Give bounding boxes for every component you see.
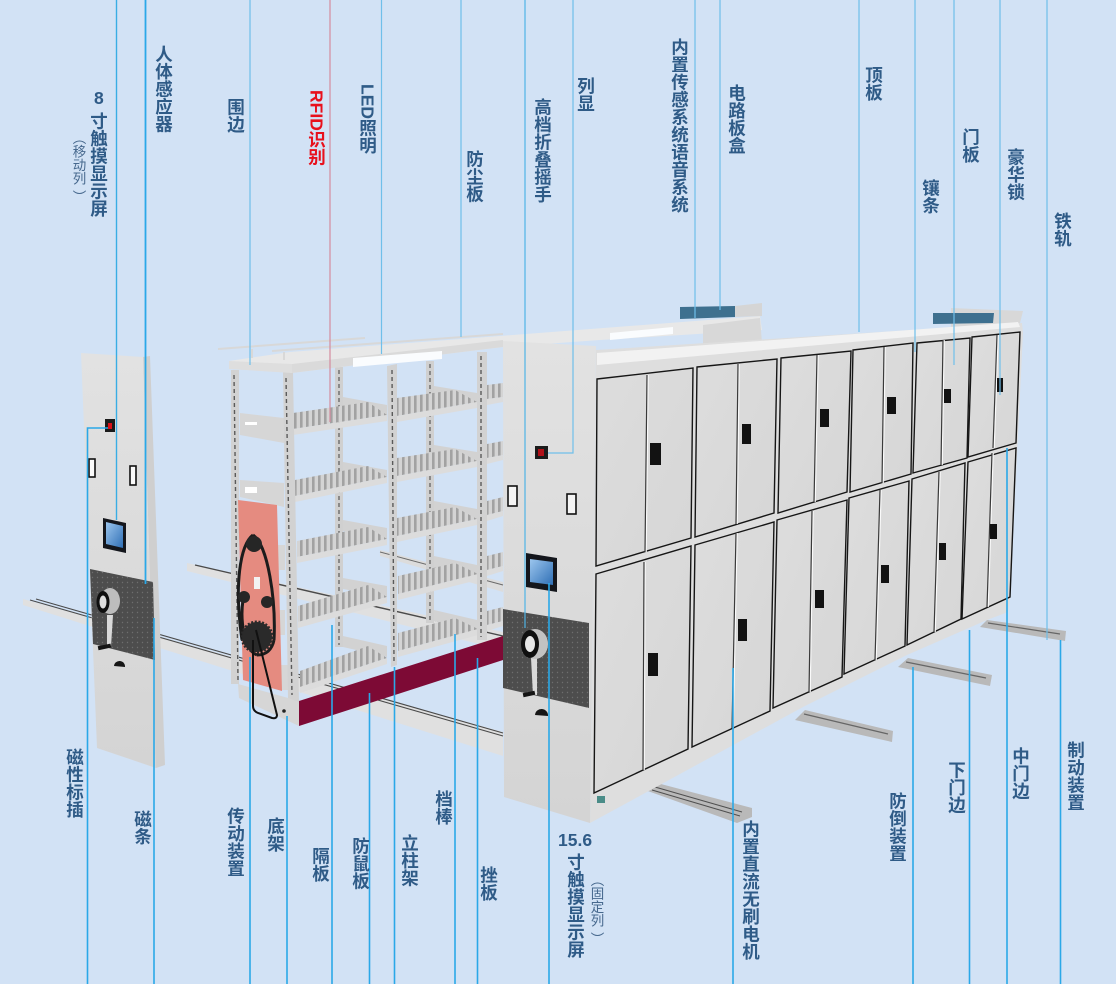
label: 隔板: 隔板 — [310, 847, 330, 882]
front uprights — [231, 352, 487, 702]
label: 传动装置: 传动装置 — [226, 807, 246, 877]
leader: 8寸触摸显示屏 — [116, 0, 118, 520]
base side — [238, 684, 299, 726]
left panel label holders — [89, 459, 136, 485]
leader: 磁性标插 — [88, 428, 108, 984]
cabinet green marker — [597, 796, 605, 803]
label: 豪华锁: 豪华锁 — [1006, 148, 1026, 200]
leader: 立柱架 — [394, 667, 396, 984]
cabinet label holders — [508, 486, 576, 514]
leader: 高档折叠摇手 — [524, 0, 526, 628]
rear unit post — [703, 318, 762, 348]
LED light bars — [353, 327, 673, 367]
left panel touch screen — [103, 518, 126, 553]
rail: inner rail — [380, 550, 503, 592]
rear top plate tab — [735, 303, 762, 317]
label: 下门边: 下门边 — [946, 761, 966, 814]
leader: 挫板 — [476, 658, 478, 984]
leader: 电路板盒 — [719, 0, 721, 310]
label: 8寸触摸显示屏（移动列） — [70, 88, 108, 217]
leader: 磁条 — [153, 618, 155, 984]
label: RFID识别: RFID识别 — [306, 90, 326, 166]
leader lines: bottom — [88, 428, 1060, 984]
label part: 寸触摸显示屏: 寸触摸显示屏 — [566, 853, 586, 958]
cabinet dark lower plate — [503, 609, 589, 708]
middle shelving unit — [218, 303, 762, 726]
leader: RFID识别 — [329, 0, 331, 422]
leader: 隔板 — [331, 625, 333, 984]
cabinet long face — [590, 323, 1023, 823]
label: 铁轨: 铁轨 — [1052, 212, 1072, 247]
leader: 底架 — [286, 716, 288, 984]
rail: rear rail — [187, 563, 503, 650]
drive mechanism — [238, 535, 286, 718]
leader: 铁轨 — [1046, 0, 1048, 640]
cabinet red LED display — [535, 446, 548, 459]
crimson anti-rodent plate — [299, 636, 503, 726]
lower doors — [594, 448, 1016, 793]
left panel red LED display — [105, 419, 115, 432]
label: 内置传感系统语音系统: 内置传感系统语音系统 — [670, 38, 690, 213]
shelves: first bay — [293, 402, 387, 693]
leader: 档棒 — [454, 634, 456, 984]
label: 电路板盒: 电路板盒 — [726, 84, 746, 154]
front rails — [645, 620, 1066, 823]
cabinet touch screen — [526, 553, 557, 592]
label part: 15.6: 15.6 — [558, 830, 592, 850]
label: 顶板: 顶板 — [864, 66, 884, 101]
leader: 下门边 — [968, 630, 970, 984]
top circuit box — [933, 313, 994, 324]
leader: 门板 — [953, 0, 955, 365]
label: 列显: 列显 — [576, 77, 596, 112]
leader: 内置直流无刷电机 — [732, 668, 734, 984]
leader: 内置传感系统语音系统 — [694, 0, 696, 318]
label part: 8: 8 — [94, 88, 104, 108]
rear brackets — [343, 386, 477, 657]
salmon drive panel — [238, 500, 282, 691]
left panel folding handle — [96, 588, 120, 650]
label: 15.6寸触摸显示屏（固定列） — [558, 830, 604, 958]
cabinet folding crank handle — [521, 629, 548, 697]
top surface — [597, 322, 1020, 365]
leader: 防鼠板 — [368, 693, 370, 984]
label: 中门边: 中门边 — [1010, 747, 1030, 800]
label part: 移动列 note: （ 移动列 ） — [70, 131, 86, 204]
label part: 寸触摸显示屏: 寸触摸显示屏 — [88, 112, 108, 217]
leader: 镶条 — [914, 0, 916, 352]
leader: 15.6寸触摸显示屏 — [548, 583, 550, 984]
left panel dark lower plate — [90, 569, 155, 660]
door centre seams — [643, 335, 997, 770]
rear circuit box — [680, 306, 735, 319]
label: 底架: 底架 — [266, 817, 286, 852]
rails behind the units — [23, 550, 503, 756]
top plate — [229, 316, 762, 373]
leader: 防倒装置 — [912, 667, 914, 984]
leader: 围边 — [249, 0, 251, 365]
leader: 制动装置 — [1060, 640, 1062, 984]
door locks — [648, 378, 1003, 676]
shelves: third bay — [487, 383, 503, 631]
cabinet end face — [503, 341, 596, 823]
upper doors — [596, 332, 1020, 566]
leader: 列显 — [548, 0, 573, 453]
label: 围边: 围边 — [226, 98, 246, 133]
rail foot 3 — [898, 658, 992, 686]
label part: 固定列 note: （ 固定列 ） — [588, 873, 604, 946]
leader lines: top — [116, 0, 1047, 640]
leader: 防尘板 — [460, 0, 462, 337]
label: 制动装置: 制动装置 — [1066, 741, 1086, 811]
label: 防尘板: 防尘板 — [464, 150, 484, 202]
rail foot 4 — [980, 620, 1066, 641]
rear uprights — [335, 361, 434, 647]
rail: long left rail — [23, 599, 503, 756]
side brackets — [240, 413, 288, 690]
label: 挫板: 挫板 — [478, 866, 498, 901]
rear plate behind top box — [951, 308, 1023, 327]
leader: 顶板 — [858, 0, 860, 332]
label: 立柱架: 立柱架 — [400, 834, 420, 886]
leader: 人体感应器 — [144, 0, 146, 584]
cabinet half-round grip — [535, 709, 548, 716]
shelves: second bay — [397, 390, 478, 657]
label: 镶条: 镶条 — [920, 179, 940, 214]
leader: LED照明 — [380, 0, 382, 354]
label: 高档折叠摇手: 高档折叠摇手 — [532, 98, 552, 203]
label: 防鼠板: 防鼠板 — [350, 837, 370, 890]
label: LED照明: LED照明 — [358, 84, 378, 154]
label: 防倒装置: 防倒装置 — [888, 792, 908, 862]
top guard rails — [218, 334, 503, 360]
door seam highlights — [644, 335, 998, 770]
label: 门板: 门板 — [960, 128, 980, 163]
left panel half-round grip — [114, 661, 125, 667]
leader: 豪华锁 — [999, 0, 1001, 395]
rail foot 1 — [645, 783, 752, 823]
rail foot 2 — [795, 710, 893, 742]
label: 内置直流无刷电机: 内置直流无刷电机 — [740, 820, 760, 960]
label: 磁性标插: 磁性标插 — [64, 748, 84, 818]
leader: 传动装置 — [249, 657, 251, 984]
label: 磁条: 磁条 — [132, 810, 152, 845]
label: 档棒: 档棒 — [434, 790, 454, 825]
label: 人体感应器: 人体感应器 — [154, 45, 174, 132]
leader: 中门边 — [1006, 448, 1008, 984]
front mobile cabinet — [503, 308, 1023, 823]
left end panel — [81, 353, 165, 768]
